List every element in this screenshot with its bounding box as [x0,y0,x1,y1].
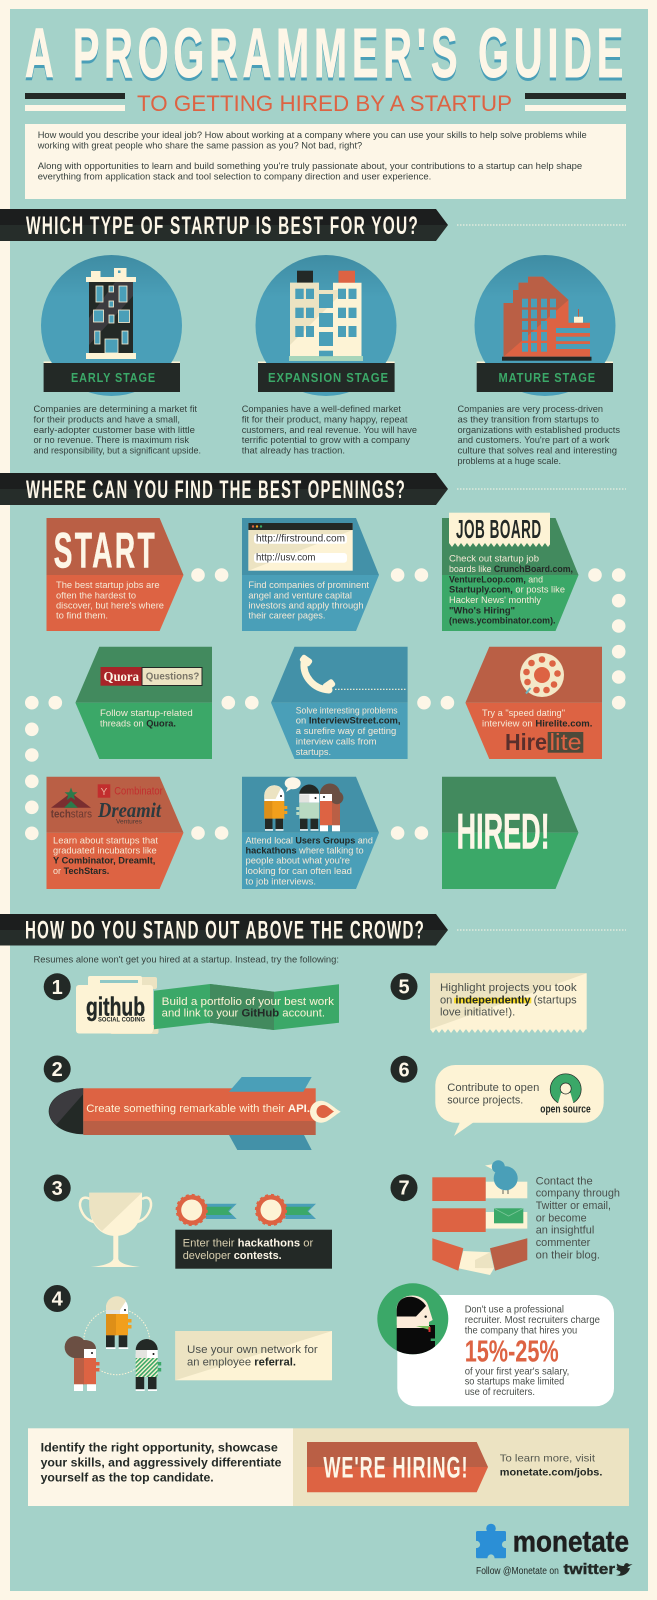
callout: recruiters: Don't use a professional [465,1305,564,1316]
step: hirelite: Try a "speed dating" [482,708,565,719]
step: venture firm career pages: investors and apply through [248,601,364,612]
step: users groups: to job interviews. [246,876,316,887]
step: interviewstreet: interview calls from [296,736,377,747]
icon: handshake [432,1238,527,1275]
step: start [46,518,184,631]
tip 3: hackathons: developer contests. [183,1250,282,1262]
panel: mature stage: MATURE STAGE [498,371,596,385]
tip 6: open source: Contribute to open [447,1082,539,1094]
logo: hirelite: Hire [505,729,547,755]
tip 7: contact: 7 [398,1178,410,1200]
dotted path connecting steps [25,568,626,840]
icon: job board ticket: JOB BOARD [456,514,542,544]
step: quora: Follow startup-related [100,708,193,719]
icon: browser window [248,523,353,571]
summary panel: your skills, and aggressively differentiate [41,1456,282,1470]
icon: quora logo: Quora [104,670,139,685]
tip 1: github: 1 [52,977,63,999]
hiring panel: To learn more, visit [500,1453,595,1465]
step: hirelite: interview on Hirelite.com. [482,718,592,729]
icon: browser window: http://firstround.com [256,534,345,545]
callout: recruiters: use of recruiters. [465,1387,535,1398]
icon: envelope [494,1208,523,1223]
tip 4: referral [44,1285,332,1391]
logo: techstars: techstars [51,809,92,821]
step: interviewstreet: a surefire way of getting [296,726,396,737]
panel: early stage: and responsibility, but a significant upside. [34,446,201,456]
logo: hirelite [505,729,583,755]
step: job boards: boards like CrunchBoard.com, [449,564,573,575]
summary panel: yourself as the top candidate. [41,1470,214,1484]
icon: rotary dial [520,653,564,697]
step: users groups: Attend local Users Groups and [246,835,373,846]
icon: recruiter [397,1296,436,1360]
hiring panel: monetate.com/jobs. [500,1467,602,1479]
follow on twitter: twitter [564,1561,615,1578]
tip 3: hackathons [44,1174,332,1269]
intro text box: working with great people who share the same passion as you? Not bad, right? [37,140,362,151]
callout: recruiters [377,1283,614,1406]
step: job boards: "Who's Hiring" [449,605,515,616]
step: interviewstreet: on InterviewStreet.com, [296,716,401,727]
panel: expansion stage: customers, and real revenue. You will have [242,425,417,436]
step: job boards [442,513,578,631]
tip 7: contact: an insightful [536,1225,594,1237]
step: start: to find them. [56,611,108,622]
tip 7: contact: company through [536,1188,620,1200]
step: job boards: Check out startup job [449,554,539,565]
callout: recruiters: recruiter. Most recruiters charge [465,1315,601,1326]
icon: dark building [86,268,136,359]
step: incubators: or TechStars. [53,866,109,877]
step: hirelite [465,647,602,759]
tip 7: contact: on their blog. [536,1250,600,1262]
tip 1: github: and link to your GitHub account. [162,1008,325,1020]
step: job boards: (news.ycombinator.com). [449,615,556,626]
panel: early stage: or no revenue. There is maximum risk [34,435,189,446]
tip 6: open source [390,1056,604,1136]
follow on twitter: Follow @Monetate on [476,1566,559,1577]
intro text box: Along with opportunities to learn and build something you're truly passionate about, your contributions to a startup can help shape [38,161,582,172]
section banner: which type of startup: WHICH TYPE OF STARTUP IS BEST FOR YOU? [26,212,419,240]
icon: trophy [80,1193,151,1267]
callout: recruiters: of your first year's salary, [465,1366,569,1377]
tip 3: hackathons: 3 [52,1178,63,1200]
icon: medals [176,1195,316,1225]
step: venture firm career pages: angel and venture capital [248,590,352,601]
step: start: often the hardest to [56,590,136,601]
icon: left person [65,1336,100,1391]
step: interviewstreet: startups. [296,747,331,758]
step: venture firm career pages: Find companies of prominent [248,580,369,591]
panel: expansion stage: fit for their product, many happy, repeat [242,414,408,425]
step: start: The best startup jobs are [56,580,160,591]
panel: expansion stage: terrific potential to grow with a company [242,435,410,446]
step: users groups: people about what you're [246,856,350,867]
follow on twitter [476,1561,633,1578]
icon: top person [106,1296,132,1349]
logo: dreamit ventures: Ventures [116,819,142,825]
icon: red building [502,277,592,361]
panel: early stage: for their products and have a small, [34,414,180,425]
step: hired: HIRED! [457,803,550,859]
panel: early stage [34,255,201,456]
step: interviewstreet: Solve interesting problems [296,705,398,716]
logo: hirelite: lite [550,729,582,755]
tip 7: contact: Twitter or email, [536,1200,611,1212]
tip 4: referral: Use your own network for [187,1344,318,1356]
step: venture firm career pages: their career pages. [248,611,326,622]
step: incubators: Learn about startups that [53,835,158,846]
step: venture firm career pages [242,518,379,631]
tip 5: independent projects [390,973,587,1033]
icon: browser window: http://usv.com [256,552,316,563]
panel: early stage: Companies are determining a market fit [34,404,197,415]
tip 2: api rocket: 2 [52,1059,63,1081]
tip 2: api rocket [44,1056,341,1150]
tip 1: github: Build a portfolio of your best work [162,996,335,1008]
tip 5: independent projects: 5 [398,976,410,998]
step: quora [75,647,212,759]
icon: telephone handset [299,654,406,692]
panel: expansion stage [242,255,417,456]
tip 5: independent projects: love initiative!). [440,1007,515,1019]
step: interviewstreet [271,647,408,759]
logo: y combinator: Combinator [114,785,163,797]
icon: right person [136,1339,161,1391]
tip 5: independent projects: Highlight projects you took [440,982,577,994]
step: users groups [242,777,379,889]
step: job boards: Startuply.com, or posts like [449,585,565,596]
step: incubators [46,777,184,889]
summary panel [28,1428,293,1506]
tip 1: github [44,973,339,1034]
icon: cream building [289,271,363,361]
panel: mature stage [458,255,620,467]
tip 1: github: SOCIAL CODING [98,1018,145,1024]
tip 3: hackathons: Enter their hackathons or [183,1238,314,1250]
tip 2: api rocket: Create something remarkable with their API. [86,1103,310,1115]
panel: mature stage: organizations with established products [458,425,620,436]
panel: mature stage: culture that solves real and interesting [458,446,617,456]
tip 1: github: github [86,992,145,1022]
panel: mature stage: Companies are very process-driven [458,404,603,415]
section intro text: Resumes alone won't get you hired at a startup. Instead, try the following: [34,954,339,965]
step: incubators: graduated incubators like [53,846,157,857]
step: start: discover, but here's where [56,601,164,612]
intro text box [25,124,626,199]
logo: y combinator [98,784,163,798]
icon: quora logo [100,667,202,686]
logo: open source initiative [540,1074,591,1116]
section banner: where to find openings: WHERE CAN YOU FIND THE BEST OPENINGS? [26,476,406,504]
step: hired [442,777,578,889]
tip 5: independent projects: on independently (startups [440,994,577,1006]
logo: monetate: monetate [513,1526,629,1559]
step: users groups: looking for can often lead [246,866,352,877]
tip 6: open source: 6 [398,1059,410,1081]
hiring panel: WE'RE HIRING! [323,1452,468,1485]
step: job boards: Hacker News' monthly [449,595,541,606]
step: start: START [54,523,157,579]
step: quora: threads on Quora. [100,718,176,729]
intro text box: everything from application stack and tool selection to company direction and user experience. [38,171,431,182]
subtitle: TO GETTING HIRED BY A STARTUP [137,91,512,116]
panel: expansion stage: Companies have a well-defined market [242,404,401,415]
tip 7: contact: Contact the [536,1175,593,1187]
callout: recruiters: 15%-25% [465,1335,559,1369]
panel: early stage: early-adopter customer base with little [34,425,195,436]
tip 7: contact [390,1160,620,1275]
intro text box: How would you describe your ideal job? How about working at a company where you can use your skills to help solve problems while [38,130,587,141]
logo: monetate [473,1524,629,1562]
panel: mature stage: problems at a huge scale. [458,456,561,467]
panel: mature stage: and customers. You're part of a work [458,435,610,446]
tip 6: open source: source projects. [447,1095,523,1107]
step: incubators: Y Combinator, DreamIt, [53,856,156,867]
callout: recruiters: the company that hires you [465,1325,577,1336]
subtitle [25,91,626,116]
tip 7: contact: or become [536,1212,587,1224]
panel: expansion stage: EXPANSION STAGE [268,371,389,385]
icon: quora logo: Questions? [146,672,199,682]
panel: early stage: EARLY STAGE [71,371,156,385]
summary panel: Identify the right opportunity, showcase [41,1440,278,1454]
hiring panel [293,1428,629,1506]
logo: y combinator: Y [101,787,108,798]
callout: recruiters: so startups make limited [465,1377,564,1388]
panel: expansion stage: that already has traction. [242,446,345,456]
tip 4: referral: an employee referral. [187,1357,296,1369]
step: job boards: VentureLoop.com, and [449,574,543,585]
icon: bird [485,1160,518,1194]
step: users groups: hackathons where talking to [246,846,364,857]
panel: mature stage: as they transition from startups to [458,414,599,425]
tip 4: referral: 4 [52,1288,64,1310]
tip 7: contact: commenter [536,1237,591,1249]
icon: people talking [264,777,343,831]
logo: dreamit ventures: Dreamit [97,798,162,822]
logo: open source initiative: open source [540,1104,591,1116]
